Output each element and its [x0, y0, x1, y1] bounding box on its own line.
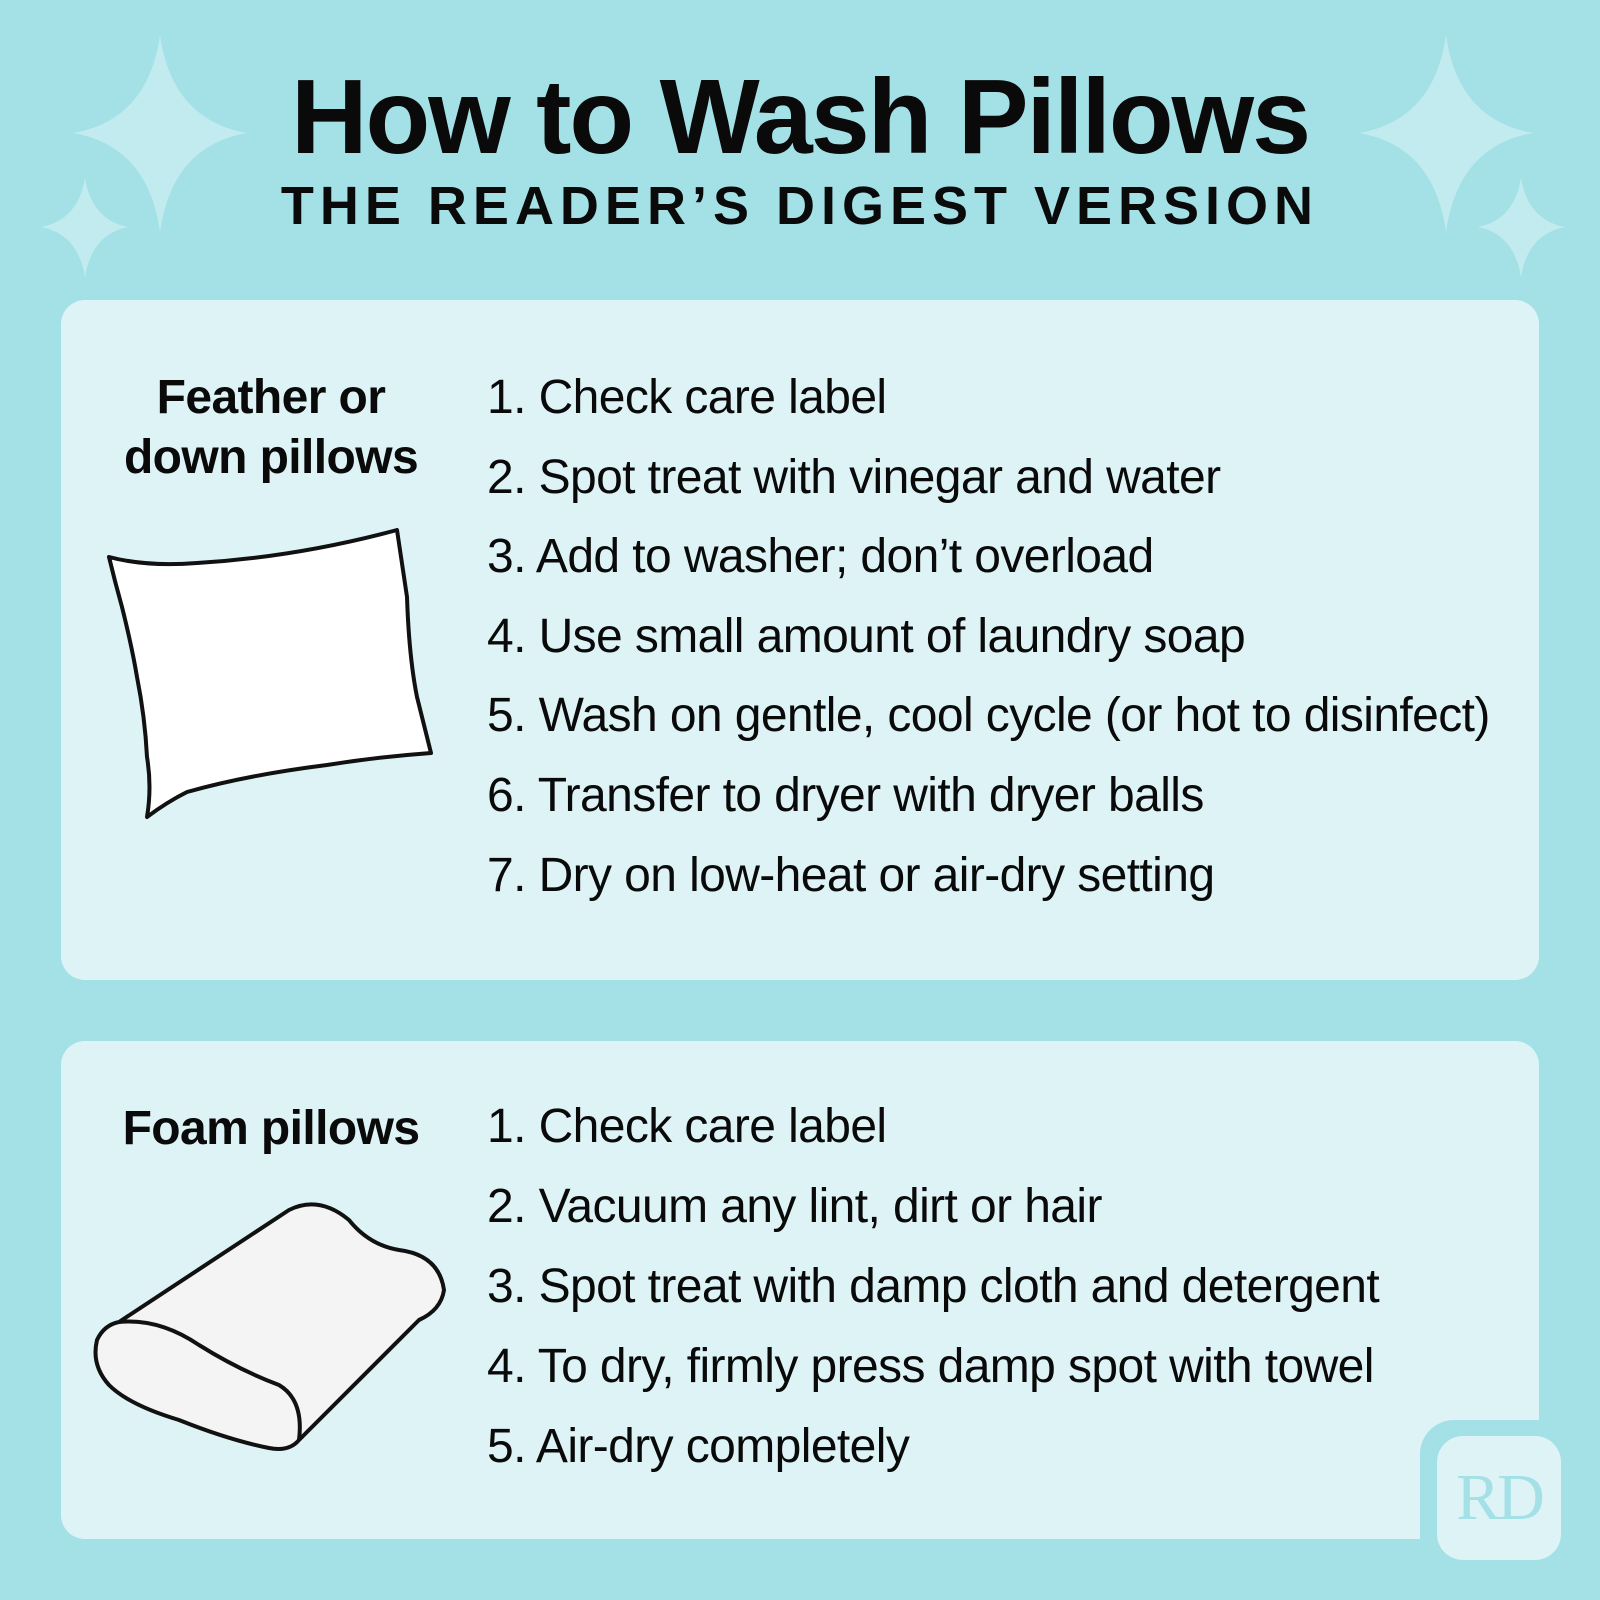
panel: foam pillows: [61, 1041, 1539, 1539]
icon: foam pillow: [94, 1202, 446, 1451]
decorative sparkles: [42, 36, 1564, 276]
steps list: foam: 3. Spot treat with damp cloth and detergent: [487, 1260, 1379, 1313]
steps list: feather: 4. Use small amount of laundry soap: [487, 610, 1245, 663]
steps list: foam: 2. Vacuum any lint, dirt or hair: [487, 1180, 1102, 1233]
steps list: foam: [487, 1100, 1380, 1473]
logo: RD badge: [1420, 1420, 1600, 1600]
steps list: feather: 2. Spot treat with vinegar and water: [487, 451, 1220, 504]
heading: feather: [124, 371, 418, 484]
logo: RD badge: RD: [1456, 1461, 1542, 1534]
steps list: feather: 7. Dry on low-heat or air-dry setting: [487, 849, 1214, 902]
steps list: feather: [487, 371, 1490, 902]
heading: foam: Foam pillows: [123, 1102, 419, 1155]
title: How to Wash Pillows: [291, 58, 1309, 176]
steps list: foam: 1. Check care label: [487, 1100, 886, 1153]
steps list: feather: 1. Check care label: [487, 371, 886, 424]
steps list: feather: 5. Wash on gentle, cool cycle (or hot to disinfect): [487, 689, 1490, 742]
steps list: foam: 4. To dry, firmly press damp spot with towel: [487, 1340, 1374, 1393]
icon: feather pillow: [106, 528, 433, 820]
heading: feather: down pillows: [124, 431, 418, 484]
heading: feather: Feather or: [157, 371, 385, 424]
steps list: feather: 6. Transfer to dryer with dryer balls: [487, 769, 1204, 822]
steps list: feather: 3. Add to washer; don’t overload: [487, 530, 1154, 583]
subtitle: THE READER’S DIGEST VERSION: [281, 176, 1319, 236]
steps list: foam: 5. Air-dry completely: [487, 1420, 909, 1473]
panel: feather or down pillows: [61, 300, 1539, 980]
